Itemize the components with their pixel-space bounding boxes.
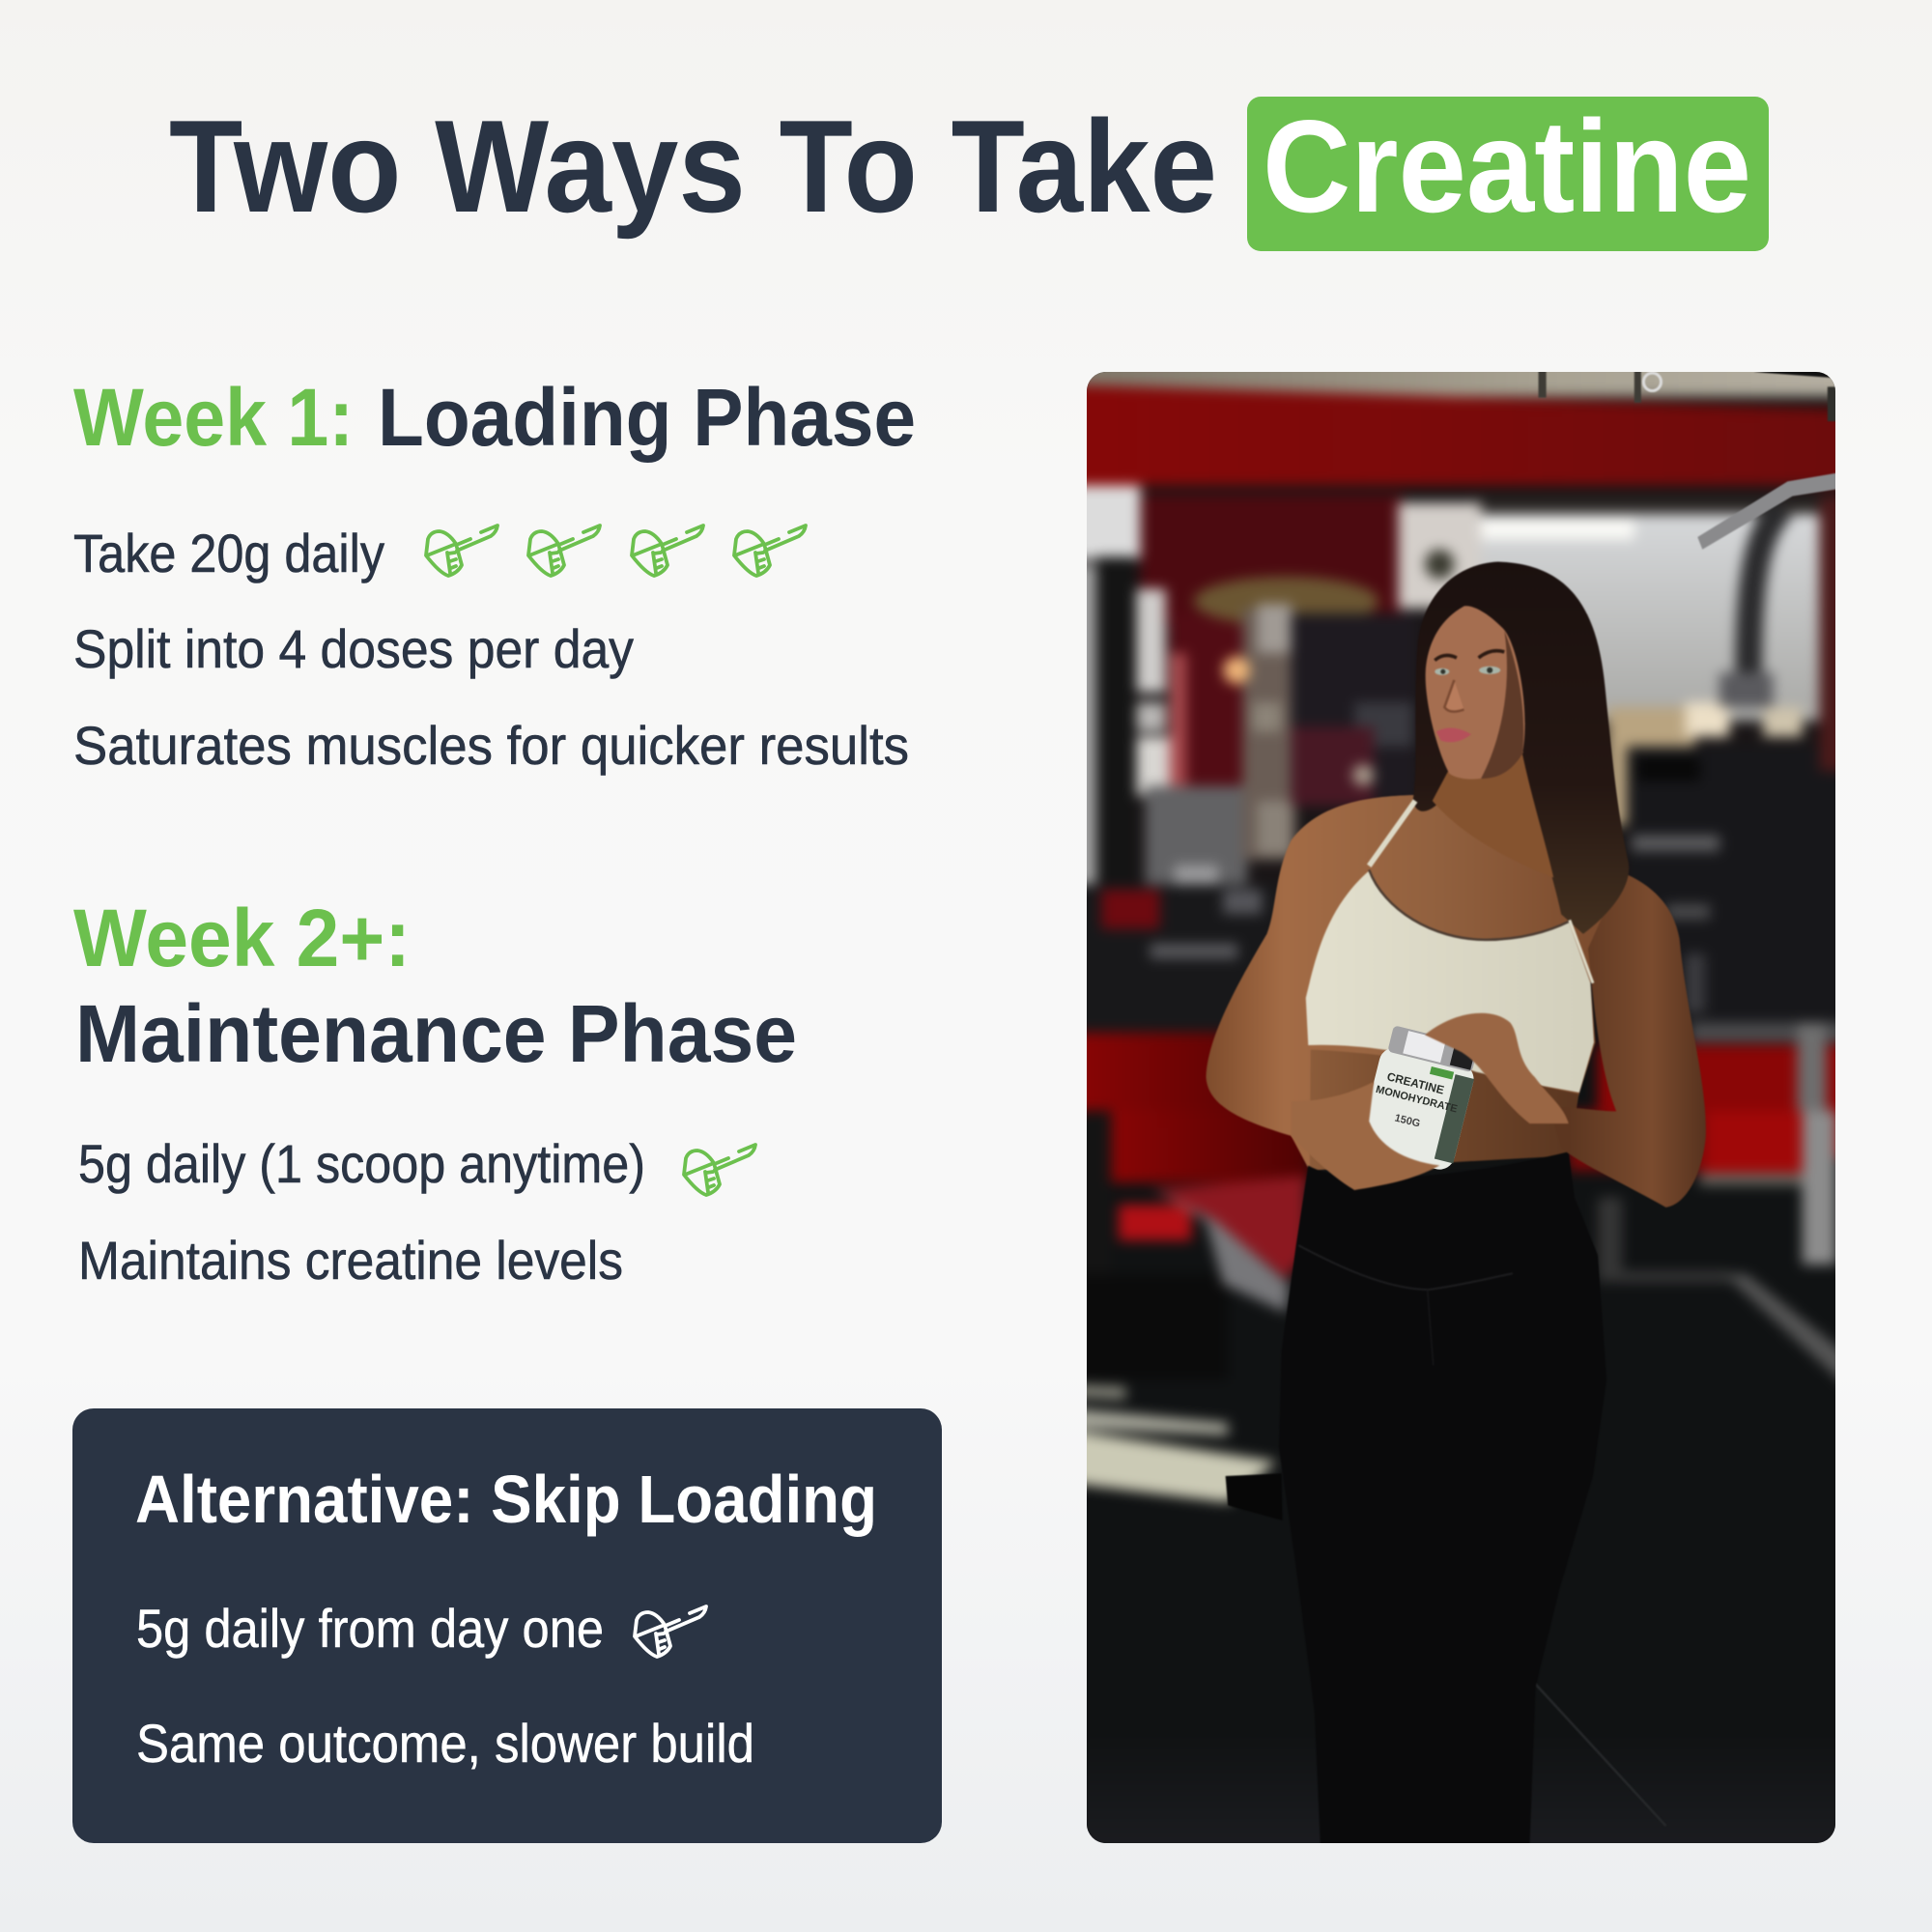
leggings bbox=[1279, 1151, 1606, 1846]
creatine jar: MONOHYDRATE bbox=[1375, 1084, 1459, 1116]
title bbox=[169, 93, 1769, 251]
heading: week 1 loading phase bbox=[73, 372, 916, 463]
text: saturates muscles: Saturates muscles for quicker results bbox=[73, 715, 909, 776]
creatine jar: 150G bbox=[1393, 1113, 1421, 1130]
hair bbox=[1413, 562, 1629, 934]
woman figure bbox=[1206, 562, 1706, 1846]
ceiling posts and ring bbox=[1226, 367, 1837, 1826]
hair strand over right shoulder bbox=[1521, 753, 1559, 880]
heading: week 2+ maintenance phase: Maintenance Phase bbox=[75, 988, 797, 1079]
text: 5g from day one: 5g daily from day one bbox=[136, 1598, 604, 1659]
gym bar top right bbox=[1697, 471, 1845, 550]
title highlight: Creatine: Creatine bbox=[1263, 93, 1751, 240]
text: 5g daily: 5g daily (1 scoop anytime) bbox=[78, 1133, 645, 1194]
panel: alternative skip loading bbox=[72, 1408, 942, 1843]
text: split doses: Split into 4 doses per day bbox=[73, 618, 634, 679]
heading: week 2+ maintenance phase: Week 2+: bbox=[73, 893, 411, 983]
heading: alternative: Alternative: Skip Loading bbox=[135, 1462, 877, 1537]
icon: white scoop bbox=[635, 1606, 706, 1657]
upper hand bbox=[1425, 1013, 1569, 1123]
abdomen shade bbox=[1310, 1050, 1578, 1171]
heading: week 1 loading phase: Loading Phase bbox=[378, 372, 916, 463]
title: Two Ways To Take bbox=[169, 93, 1217, 240]
crop top bbox=[1306, 870, 1594, 1093]
creatine jar: CREATINE bbox=[1385, 1069, 1445, 1097]
panel: loading phase bbox=[73, 372, 916, 776]
heading: week 1 loading phase: Week 1: bbox=[73, 372, 354, 463]
gym background bbox=[1072, 357, 1861, 1889]
left hand bbox=[1292, 1082, 1439, 1190]
text: same outcome: Same outcome, slower build bbox=[136, 1713, 754, 1774]
text: maintains levels: Maintains creatine levels bbox=[78, 1230, 623, 1291]
heading: week 2+ maintenance phase bbox=[73, 893, 797, 1079]
torso and left arm bbox=[1206, 795, 1622, 1168]
creatine jar bbox=[1368, 1026, 1474, 1170]
text: take 20g daily: Take 20g daily bbox=[73, 523, 384, 583]
photo: woman holding creatine jar in gym bbox=[1072, 357, 1861, 1889]
lower background in second coordinate frame bbox=[1072, 1111, 1861, 1889]
neck bbox=[1433, 747, 1559, 880]
face bbox=[1426, 606, 1525, 780]
right arm bbox=[1549, 872, 1706, 1208]
icon: four scoops bbox=[426, 526, 806, 576]
panel: maintenance phase bbox=[73, 893, 797, 1291]
icon: one scoop bbox=[684, 1145, 755, 1195]
hands bbox=[1292, 1013, 1569, 1190]
